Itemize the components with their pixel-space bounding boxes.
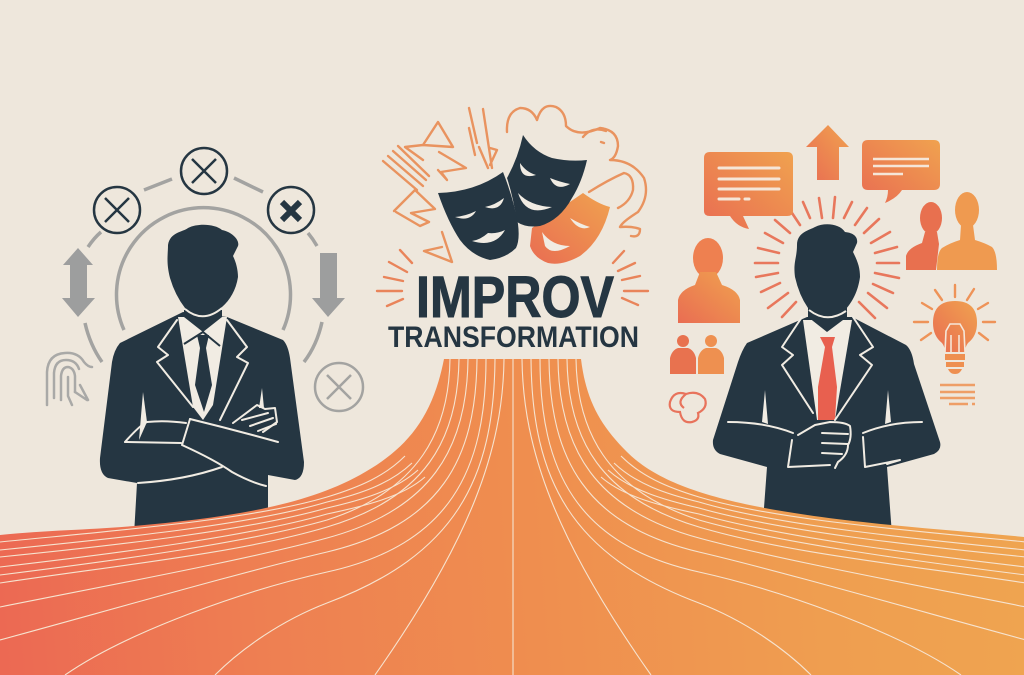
icon: cloud outline bbox=[670, 393, 706, 422]
speech bubble large bbox=[704, 152, 793, 229]
doodle triangle bbox=[405, 122, 453, 160]
icon: double arrow bbox=[62, 248, 95, 317]
dark mask right bbox=[507, 135, 587, 226]
bulb rays bbox=[914, 285, 995, 340]
person icon left bbox=[678, 238, 740, 323]
right man neck bbox=[808, 306, 847, 332]
icon: grey x circle bbox=[315, 363, 363, 411]
right man lapels, arms and hands bbox=[728, 317, 922, 468]
title: IMPROV: IMPROV bbox=[416, 265, 614, 330]
doodle small triangle bbox=[424, 232, 452, 262]
icon: lightbulb bbox=[914, 285, 995, 404]
icon: fingerprint bbox=[47, 353, 92, 405]
icon: bold x circle right bbox=[268, 187, 314, 233]
up arrow bbox=[806, 125, 849, 180]
doodle zigzag bbox=[394, 190, 435, 226]
rays around title bbox=[377, 250, 648, 306]
comedy and tragedy masks bbox=[438, 135, 610, 264]
left man shirt bbox=[178, 317, 227, 420]
right man jacket bbox=[713, 317, 940, 535]
doodle hatch lines bbox=[383, 146, 429, 190]
right man shirt bbox=[803, 320, 852, 420]
two small people bbox=[670, 335, 724, 374]
flow lines bbox=[0, 359, 1024, 675]
orange mask bbox=[530, 193, 610, 264]
right man head bbox=[794, 224, 860, 317]
inner grey halo arc bbox=[116, 208, 290, 330]
icon: x circle top bbox=[181, 148, 227, 194]
people pair top right bbox=[906, 192, 997, 270]
left figure: closed-off businessman bbox=[100, 225, 304, 535]
doodle small arrow bbox=[438, 152, 466, 180]
speech bubble small bbox=[862, 140, 940, 203]
center doodles bbox=[383, 106, 646, 262]
dark mask left bbox=[438, 172, 519, 260]
doodle vertical strokes bbox=[469, 108, 497, 168]
subtitle: TRANSFORMATION: TRANSFORMATION bbox=[388, 321, 639, 354]
note lines bbox=[940, 385, 975, 404]
orange flowing path bbox=[0, 359, 1024, 675]
icon: x circle left bbox=[94, 187, 140, 233]
left man tie bbox=[195, 335, 212, 412]
left man neck bbox=[184, 310, 222, 332]
icon: down arrow bbox=[312, 253, 345, 317]
right man tie bbox=[818, 337, 837, 420]
outer grey arc segments bbox=[85, 178, 322, 362]
sunburst rays around right head bbox=[755, 197, 899, 318]
right figure: open businessman bbox=[713, 224, 940, 535]
left man lapels and arm outlines bbox=[125, 320, 278, 486]
left man head bbox=[168, 225, 238, 317]
doodle cloud swirl bbox=[507, 106, 646, 236]
left man jacket bbox=[100, 312, 304, 535]
